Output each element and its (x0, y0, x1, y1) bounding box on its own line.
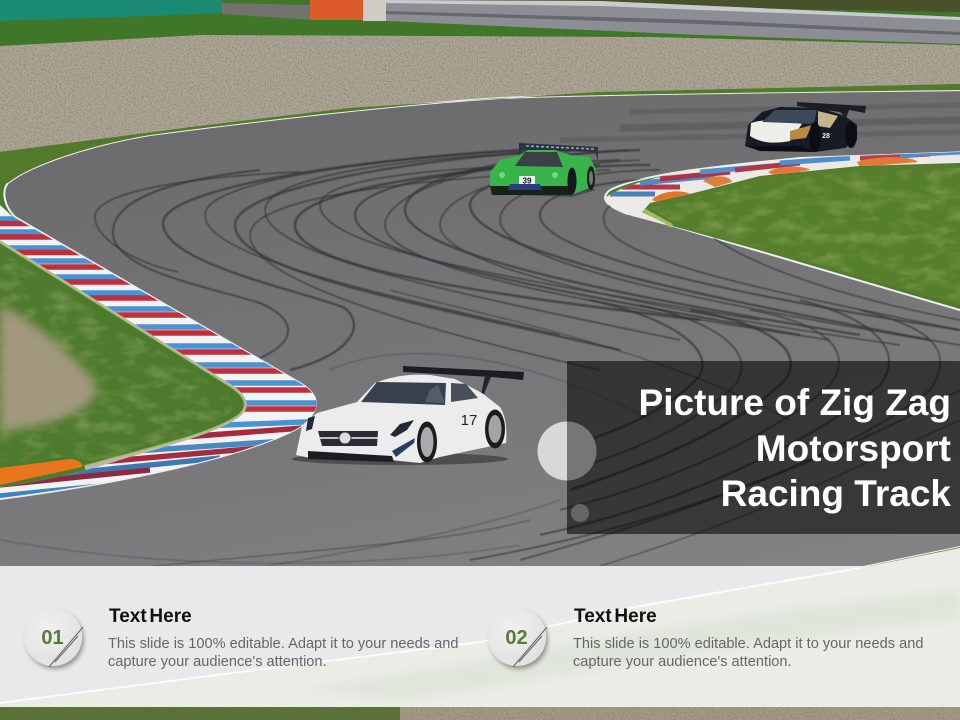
right infield grass (642, 208, 764, 252)
car: white Mercedes race car (292, 366, 524, 465)
decorative small circle (571, 504, 589, 522)
grass texture overlay (0, 258, 232, 462)
badge 01 (24, 608, 83, 667)
car number: 39 (523, 176, 532, 186)
item 2 description: This slide is 100% editable. Adapt it to your needs and (573, 636, 923, 652)
car: black and white race car (745, 102, 866, 152)
badge 01: 01 (41, 627, 64, 649)
right blue red white kerb (606, 152, 960, 225)
title: Picture of Zig Zag (639, 382, 951, 423)
title: Racing Track (721, 473, 951, 514)
car number: 17 (461, 412, 477, 429)
infield concrete edge (0, 240, 247, 468)
badge 02: 02 (505, 627, 528, 649)
left blue red white kerb (0, 205, 316, 498)
item 2 description (573, 636, 923, 670)
title (639, 382, 951, 514)
title: Motorsport (756, 428, 951, 469)
tyre skid marks (0, 105, 960, 610)
photo background (0, 0, 960, 566)
gravel patch in infield (0, 305, 96, 432)
item 2 heading: Text Here (574, 606, 657, 627)
decorative large circle (538, 422, 596, 480)
badge 02 (488, 608, 547, 667)
title panel (567, 361, 960, 534)
grass beside lower track (850, 547, 960, 575)
bottom info panel (0, 548, 960, 707)
orange curb (0, 459, 82, 485)
far grass verge (0, 84, 960, 183)
item 2 (488, 606, 923, 670)
item 2 description: capture your audience's attention. (573, 654, 792, 670)
item 1 description (108, 636, 458, 670)
grass texture overlay (650, 168, 960, 302)
car: green race car (490, 143, 598, 197)
item 1 description: capture your audience's attention. (108, 654, 327, 670)
item 1 heading: Text Here (109, 606, 192, 627)
car number: 28 (822, 133, 830, 140)
gravel run-off (0, 30, 960, 155)
item 1 description: This slide is 100% editable. Adapt it to your needs and (108, 636, 458, 652)
top trackside scenery (0, 0, 960, 46)
left infield grass (0, 258, 232, 461)
bottom strip: grass and gravel (0, 706, 960, 720)
item 1 (24, 606, 458, 670)
